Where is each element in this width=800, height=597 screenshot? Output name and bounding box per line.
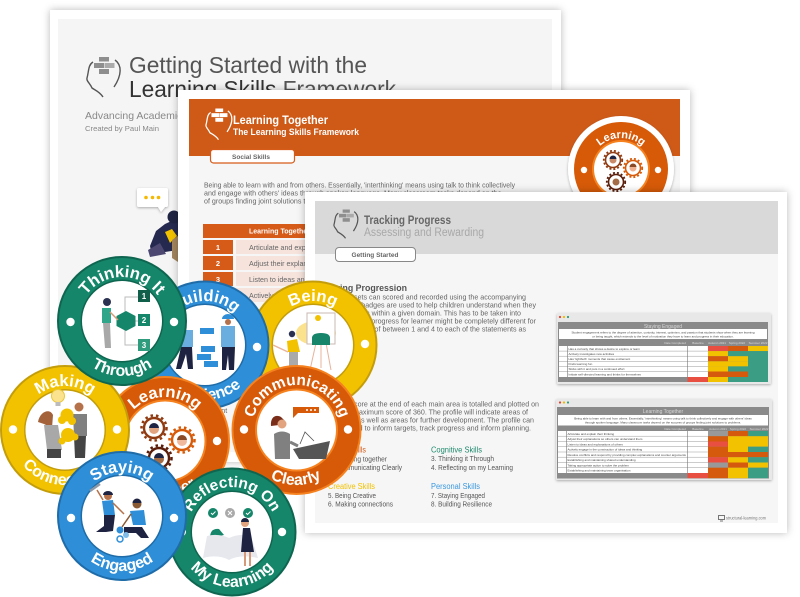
table: staying engaged: Staying Engaged — [644, 324, 682, 330]
table: learning together scores: Being able to learn with and from others. Essentially, 'interthinking' means using talk to think collectively and engage with others' ideas — [574, 416, 752, 420]
badge: building resilience: Resilience — [202, 381, 240, 399]
list: cognitive skills: Cognitive Skills — [431, 446, 482, 454]
table: learning together scores: Spring 2022 — [730, 427, 746, 431]
list: creative skills — [328, 482, 393, 508]
badge: learning together: Learning — [127, 387, 202, 410]
icon: person and flow steps: 2 — [142, 316, 147, 325]
table: staying engaged: Autumn 2021 — [708, 341, 726, 345]
pill: getting started: Getting Started — [352, 252, 399, 259]
badge: learning together — [120, 376, 230, 492]
header band — [189, 99, 680, 156]
table: staying engaged: Has a curiosity that shows a desire to explore or learn — [568, 347, 640, 351]
author: Created by Paul Main — [85, 124, 159, 133]
body text one: Give a score of between 1 and 4 to each of the statements as — [333, 326, 526, 334]
subtitle: Advancing Academic Achievement — [85, 110, 246, 122]
badge: learning large — [566, 116, 676, 192]
table: learning together scores: Establishing and maintaining team organisation — [568, 468, 631, 472]
table: learning together: Actively engage — [249, 292, 299, 300]
badge: being creative: Creative — [281, 380, 345, 404]
body text two: a graph with a maximum score of 360. The profile will indicate areas of — [307, 408, 528, 416]
subheading: The Learning Skills Framework — [233, 127, 360, 137]
badge: staying engaged — [57, 451, 187, 581]
icon: person and flow steps: 1 — [142, 292, 147, 301]
section heading: Monitoring Progression — [308, 283, 407, 293]
badge: building resilience — [154, 280, 270, 408]
body text one: each child, progress for learner might be completely different for — [335, 318, 537, 326]
table: learning together: 3 — [216, 275, 220, 284]
table: staying engaged: Baseline — [692, 341, 704, 345]
badge: being creative: Being — [288, 289, 338, 308]
icon: builders with bricks — [176, 314, 235, 370]
table: learning together — [200, 224, 359, 424]
table: staying engaged: Finds learning fun — [568, 362, 593, 366]
table: staying engaged: Spring 2022 — [729, 341, 745, 345]
badge: thinking it through — [57, 256, 187, 386]
pill: getting started — [336, 248, 416, 262]
badge: learning large: Learning — [596, 131, 646, 146]
panel: tracking progress page — [304, 192, 787, 533]
panel: learning together page — [174, 86, 694, 466]
icon: speaker at lectern — [271, 407, 330, 459]
table: staying engaged: or being taught, which extends to the level of motivation they have to learn and progress in their education. — [592, 334, 734, 338]
icon: person and flow steps: 3 — [142, 341, 147, 350]
table: learning together: 1 — [216, 243, 220, 252]
list: cognitive skills: 4. Reflecting on my Learning — [431, 463, 513, 472]
badge: building resilience: Building — [182, 289, 240, 314]
table: learning together scores: Adjust their explanations so others can understand them — [568, 437, 643, 441]
body text two — [304, 400, 539, 432]
icon: gears with faces — [142, 416, 194, 470]
badge: making connections — [0, 365, 130, 495]
icon: person and flow steps — [102, 290, 150, 351]
badge: communicating clearly: Clearly — [272, 470, 319, 486]
badge: learning together: Together — [180, 479, 193, 491]
table: learning together scores: Summer 2022 — [750, 427, 769, 431]
icon: painter at easel — [273, 313, 336, 370]
intro text — [204, 182, 515, 206]
table: learning together scores: Actively engage in the construction of ideas and thinking — [568, 448, 643, 452]
icon: head logo white — [206, 108, 232, 140]
table: learning together scores — [556, 399, 772, 480]
pill: social skills — [210, 150, 294, 163]
table: learning together: Resilient — [200, 407, 227, 415]
badge: making connections: Making — [34, 374, 96, 396]
table: learning together scores: through spoken language. Many classroom tasks depend on the success of groups finding joint solutions to problems. — [585, 420, 741, 424]
table: learning together scores: Listen to ideas and explanations of others — [568, 442, 623, 446]
list: creative skills: Creative Skills — [328, 482, 375, 491]
icon: speech bubble — [137, 188, 168, 212]
table: learning together: Articulate and explain their thinking — [249, 244, 359, 252]
table: learning together: 2 — [216, 259, 220, 268]
icon: reader and open book — [203, 508, 258, 566]
table: learning together: Listen to ideas and explanations — [249, 276, 351, 284]
header band — [315, 201, 778, 254]
table: learning together scores: Autumn 2021 — [709, 427, 727, 431]
table: learning together scores: Learning Together — [643, 409, 683, 415]
table: learning together scores: Date Completed — [664, 427, 686, 431]
list: creative skills: 5. Being Creative — [328, 491, 376, 500]
list: personal skills: 7. Staying Engaged — [431, 491, 485, 500]
body text two: relative strength as well as areas for further development. The profile can — [305, 416, 534, 424]
icon: seated figure — [148, 210, 180, 262]
table: learning together scores: Articulate and explain their thinking — [568, 432, 614, 436]
footer: website — [718, 516, 766, 522]
list: social skills: 2. Communicating Clearly — [328, 463, 402, 472]
pill: social skills: Social Skills — [232, 154, 270, 161]
table: staying engaged: Date Completed — [664, 341, 686, 345]
body text one: are making progress within a given domain. This has to be taken into — [305, 310, 521, 318]
table: learning together: Adjust their explanations — [249, 260, 327, 268]
list: social skills — [328, 446, 402, 472]
panel: getting started page — [50, 10, 561, 380]
table: learning together scores: Taking appropriate action to solve the problem — [568, 463, 629, 467]
list: personal skills: Personal Skills — [431, 482, 480, 491]
badge: staying engaged: Engaged — [91, 552, 153, 574]
footer: website: structural-learning.com — [726, 516, 766, 522]
badge: being creative — [259, 280, 378, 396]
table: staying engaged: Sticks with it and puts in a continued effort — [568, 367, 625, 371]
body text two: The numerical score at the end of each main area is totalled and plotted on — [304, 400, 539, 408]
intro text: Being able to learn with and from others. Essentially, 'interthinking' means using talk to think collectively — [204, 182, 515, 190]
body text one: These skill sets can scored and recorded using the accompanying — [319, 294, 526, 302]
body text one — [305, 294, 537, 334]
badge: staying engaged: Staying — [90, 460, 154, 482]
intro text: of groups finding joint solutions to problems. — [204, 198, 342, 206]
heading: Learning Together — [233, 115, 328, 127]
body text two: then be used to inform targets, track progress and inform planning. — [322, 424, 531, 432]
list: social skills: Social Skills — [328, 446, 366, 454]
table: learning together scores: Baseline — [692, 427, 704, 431]
table: staying engaged: Summer 2022 — [749, 341, 768, 345]
icon: people with puzzle and bulb — [38, 390, 87, 458]
list: cognitive skills — [431, 446, 513, 472]
table: learning together scores: Resolve conflicts and respond by providing complex explanations and counter arguments — [568, 453, 686, 457]
badge: reflecting on my learning: Reflecting On — [185, 476, 278, 512]
body text one: framework. The badges are used to help children understand when they — [310, 302, 536, 310]
icon: children with wrench and gears — [90, 484, 149, 542]
badge: reflecting on my learning: My Learning — [191, 560, 274, 588]
table: learning together: level — [200, 416, 215, 424]
table: staying engaged — [557, 313, 771, 384]
icon: head with bricks logo — [87, 57, 120, 97]
list: personal skills: 8. Building Resilience — [431, 500, 492, 508]
table: staying engaged: Initiate self-directed learning and thinks for themselves — [568, 372, 641, 376]
badge: reflecting on my learning — [172, 468, 296, 596]
table: staying engaged: Has 'lightbulb' moments that cause excitement — [568, 357, 630, 361]
subheading: Assessing and Rewarding — [364, 227, 484, 239]
badge: thinking it through: Through — [94, 357, 152, 377]
heading: Tracking Progress — [364, 215, 451, 227]
badge: communicating clearly: Communicating — [245, 375, 348, 418]
table: staying engaged: Student engagement refers to the degree of attention, curiosity, interest, optimism, and passion that students show when they are learning — [571, 330, 755, 334]
badge: communicating clearly — [232, 365, 362, 495]
list: social skills: 1. Learning together — [328, 454, 387, 464]
table: staying engaged: Actively investigates new activities — [568, 352, 615, 356]
badge: thinking it through: Thinking It — [78, 265, 165, 296]
intro text: and engage with others' ideas through spoken language. Many classroom tasks depend on the — [204, 190, 502, 198]
list: personal skills — [431, 482, 492, 508]
table: learning together scores: Establishing and maintaining shared understanding — [568, 458, 636, 462]
badge: making connections: Connections — [24, 460, 71, 485]
table: learning together: Learning Together — [249, 228, 310, 236]
icon: head logo grey — [334, 210, 358, 238]
title: learning skills framework: Learning Skills Framework — [129, 76, 397, 102]
list: cognitive skills: 3. Thinking it Through — [431, 454, 494, 463]
list: creative skills: 6. Making connections — [328, 500, 393, 508]
title: getting started: Getting Started with the — [129, 52, 367, 78]
